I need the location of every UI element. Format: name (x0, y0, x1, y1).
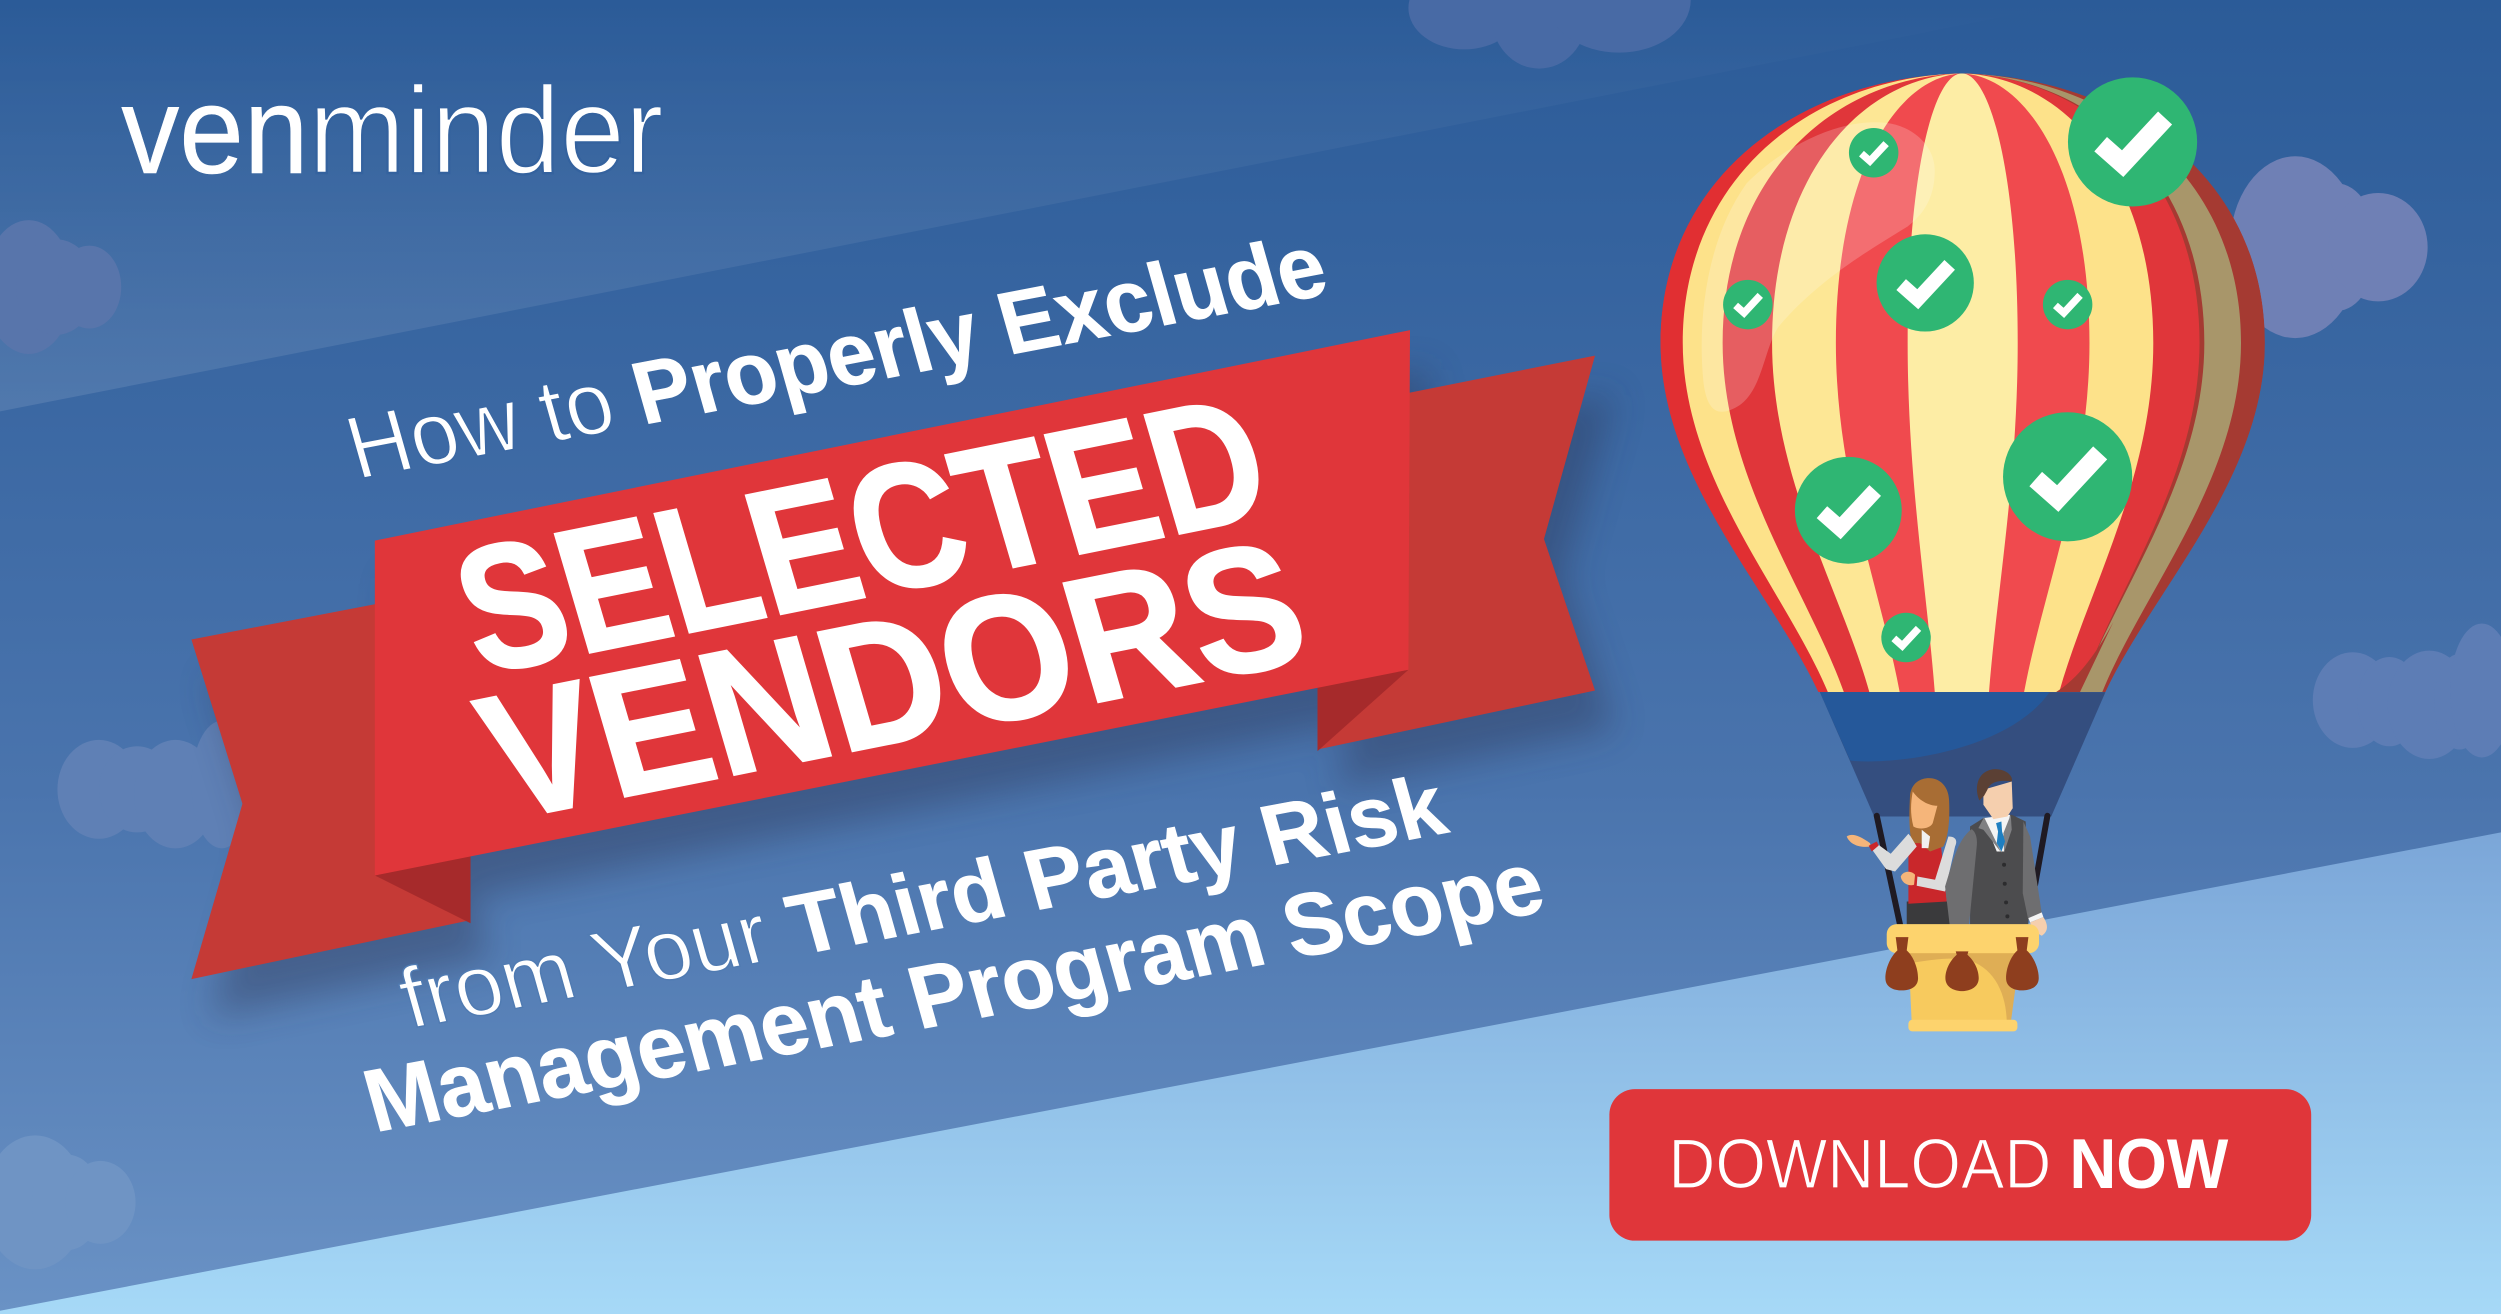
ribbon right tail (1317, 356, 1595, 749)
light ground diagonal (0, 832, 2501, 1314)
balloon mouth light (1820, 692, 2050, 761)
basket rim (1887, 924, 2039, 953)
heading: how to properly exclude: How to Properly Exclude (335, 215, 1337, 498)
heading: vendors: VENDORS (459, 503, 1326, 857)
ribbon left fold (375, 853, 471, 923)
logo: venminder: venminder (121, 61, 664, 200)
man (1945, 769, 2047, 951)
ribbon shadow (211, 368, 1614, 1017)
heading: management program scope: Management Program Scope (353, 832, 1554, 1151)
button: download now (1609, 1089, 2311, 1241)
check badge: lower right (2003, 412, 2132, 541)
balloon mouth (1820, 692, 2105, 816)
basket shade (1908, 953, 2020, 1023)
check badge: left small (1723, 280, 1773, 329)
ribbon left tail (191, 603, 471, 979)
check badge: lower left (1795, 457, 1902, 564)
cloud: far right (2313, 624, 2501, 759)
woman (1847, 778, 1956, 925)
heading: from your third party risk: from Your Third Party Risk (389, 758, 1457, 1047)
check badge: bottom small (1881, 613, 1931, 662)
cloud: bottom left (0, 1135, 136, 1269)
cloud: middle left (57, 721, 252, 848)
cloud: top (1408, 0, 1691, 69)
basket and passengers (1847, 769, 2047, 1031)
button label: DOWNLOAD NOW (1668, 1124, 2229, 1203)
money bag: centre (1945, 951, 1979, 991)
ribbon right fold (1317, 670, 1408, 751)
check badge: middle (1877, 234, 1974, 332)
button background (1609, 1089, 2311, 1241)
upper light diagonal band (0, 0, 2089, 411)
check badge: right small (2043, 280, 2092, 329)
ropes (1877, 816, 2047, 925)
heading: selected: SELECTED (434, 358, 1288, 711)
check badge: upper small (1849, 128, 1898, 178)
cloud: right of balloon (2230, 156, 2428, 338)
check badge: top right (2068, 77, 2197, 207)
ribbon banner (191, 330, 1614, 1017)
balloon envelope (1660, 73, 2265, 692)
money bag: right (2006, 937, 2039, 990)
ribbon centre (375, 330, 1410, 875)
money bag: left (1885, 937, 1918, 990)
hot air balloon (1660, 73, 2265, 1031)
basket base (1908, 1020, 2017, 1031)
cloud: upper left (0, 220, 121, 354)
balloon highlight (1702, 122, 1935, 412)
basket body (1908, 951, 2020, 1023)
